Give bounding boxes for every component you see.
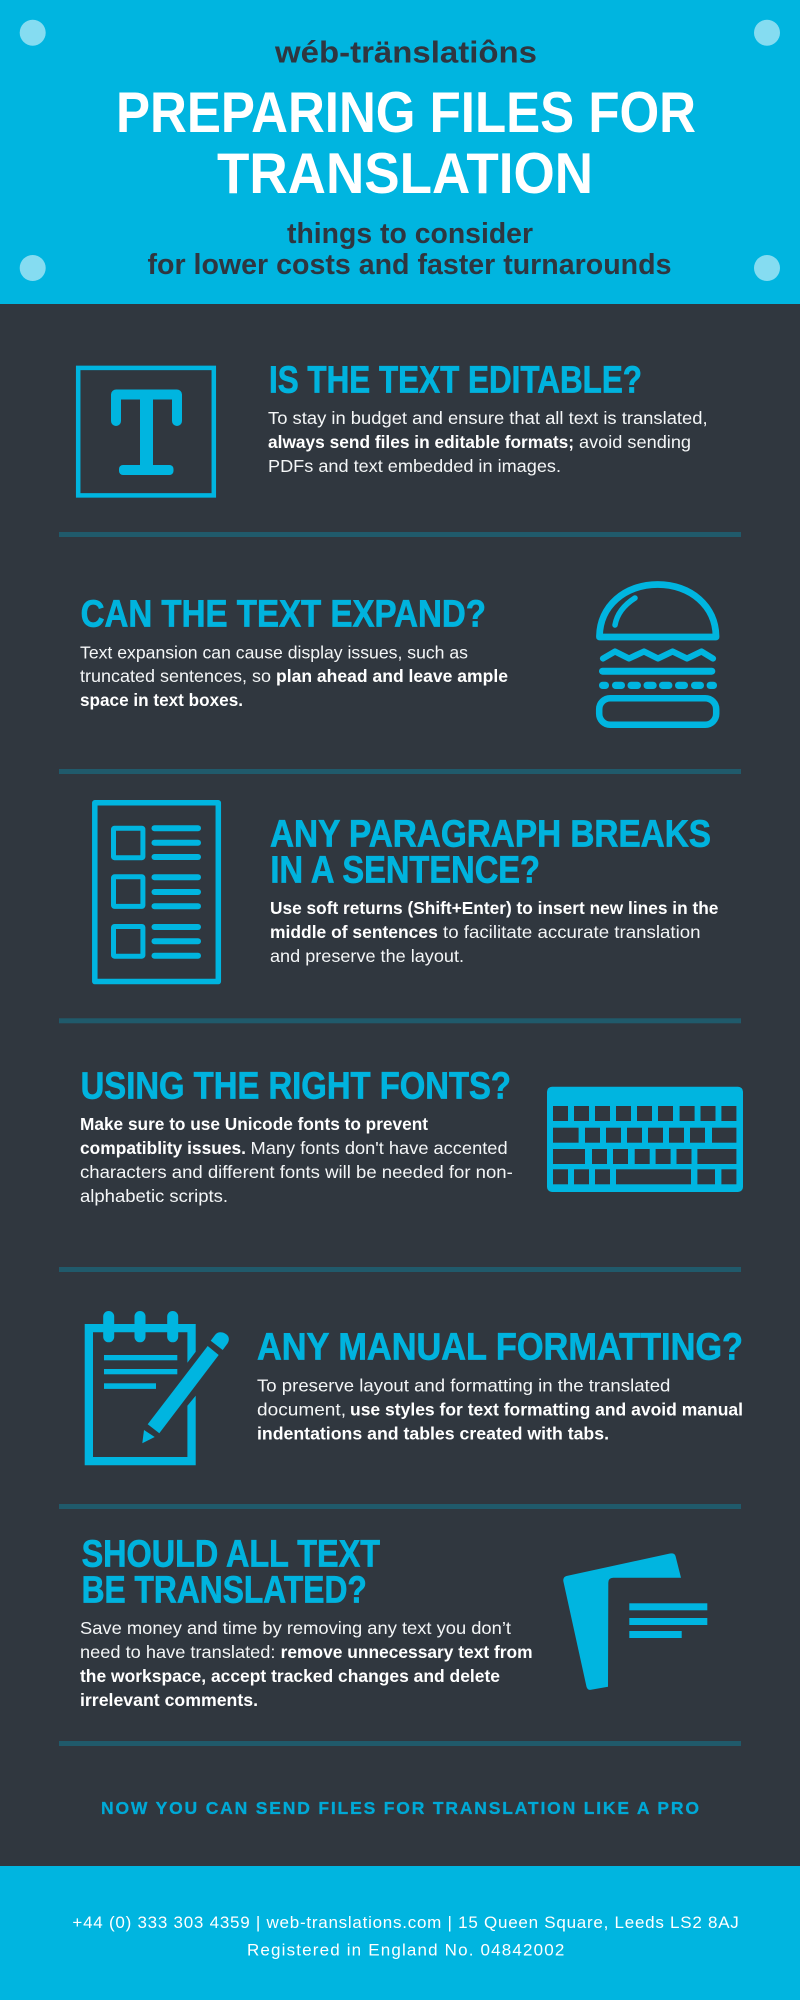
body text: characters and different fonts will be needed for non- bbox=[80, 1162, 513, 1182]
body text: To stay in budget and ensure that all text is translated, bbox=[268, 408, 708, 428]
body text bbox=[80, 1114, 513, 1206]
panel: should all text be translated bbox=[80, 1534, 707, 1710]
body text: Text expansion can cause display issues, such as bbox=[80, 642, 468, 662]
heading: BE TRANSLATED? bbox=[82, 1569, 367, 1611]
heading bbox=[270, 814, 711, 892]
icon: corner dots bbox=[20, 20, 780, 281]
contact line: +44 (0) 333 303 4359 | web-translations.com | 15 Queen Square, Leeds LS2 8AJ bbox=[72, 1913, 739, 1932]
icon: notepad and pencil bbox=[85, 1311, 229, 1465]
body text: Many fonts don't have accented bbox=[250, 1138, 508, 1158]
subtitle: things to consider bbox=[287, 218, 533, 250]
body text: document, bbox=[257, 1399, 346, 1419]
body text: PDFs and text embedded in images. bbox=[268, 456, 561, 476]
body text: plan ahead and leave ample bbox=[276, 666, 508, 686]
title: PREPARING FILES FOR bbox=[116, 81, 696, 145]
body text: always send files in editable formats; bbox=[268, 432, 574, 452]
icon: letter T in square bbox=[78, 368, 214, 495]
subtitle bbox=[148, 218, 672, 281]
icon: document with checklist bbox=[95, 803, 218, 982]
heading: IS THE TEXT EDITABLE? bbox=[269, 360, 642, 402]
body text: to facilitate accurate translation bbox=[443, 922, 700, 942]
body text bbox=[268, 408, 708, 476]
panel: is the text editable bbox=[78, 360, 708, 495]
heading: SHOULD ALL TEXT bbox=[82, 1534, 380, 1576]
panel: header banner bbox=[0, 0, 800, 304]
body text: Make sure to use Unicode fonts to prevent bbox=[80, 1114, 428, 1134]
icon: keyboard bbox=[547, 1087, 743, 1192]
registration line: Registered in England No. 04842002 bbox=[247, 1940, 564, 1959]
body text: truncated sentences, so bbox=[80, 666, 271, 686]
heading: USING THE RIGHT FONTS? bbox=[81, 1065, 511, 1107]
body text: need to have translated: bbox=[80, 1642, 276, 1662]
body text: space in text boxes. bbox=[80, 690, 243, 710]
panel: right fonts bbox=[80, 1065, 743, 1206]
body text: avoid sending bbox=[579, 432, 691, 452]
heading: ANY MANUAL FORMATTING? bbox=[257, 1326, 743, 1368]
icon: burger bbox=[599, 584, 717, 725]
body text: remove unnecessary text from bbox=[281, 1642, 533, 1662]
panel: manual formatting bbox=[85, 1311, 743, 1465]
body text: indentations and tables created with tabs. bbox=[257, 1423, 609, 1443]
body text: use styles for text formatting and avoid manual bbox=[350, 1399, 743, 1419]
body text: irrelevant comments. bbox=[80, 1690, 258, 1710]
body text bbox=[257, 1375, 743, 1443]
body text: compatiblity issues. bbox=[80, 1138, 246, 1158]
body text bbox=[80, 642, 508, 710]
body text: and preserve the layout. bbox=[270, 946, 464, 966]
panel: can the text expand bbox=[80, 584, 717, 725]
body text: Use soft returns (Shift+Enter) to insert new lines in the bbox=[270, 898, 719, 918]
heading: ANY PARAGRAPH BREAKS bbox=[270, 814, 711, 856]
icon: cropped document bbox=[563, 1553, 707, 1690]
title bbox=[116, 81, 696, 206]
brand name: wéb-tränslatiôns bbox=[274, 35, 537, 70]
body text: Save money and time by removing any text you don’t bbox=[80, 1618, 511, 1638]
body text: the workspace, accept tracked changes and delete bbox=[80, 1666, 500, 1686]
body text bbox=[270, 898, 719, 966]
panel: footer bbox=[0, 1866, 800, 2000]
heading: CAN THE TEXT EXPAND? bbox=[81, 594, 486, 636]
subtitle: for lower costs and faster turnarounds bbox=[148, 249, 672, 281]
title: TRANSLATION bbox=[217, 142, 593, 206]
heading bbox=[82, 1534, 380, 1611]
body text bbox=[80, 1618, 533, 1710]
panel: paragraph breaks bbox=[95, 803, 719, 982]
callout: NOW YOU CAN SEND FILES FOR TRANSLATION LIKE A PRO bbox=[101, 1798, 699, 1818]
body text: To preserve layout and formatting in the translated bbox=[257, 1375, 670, 1395]
heading: IN A SENTENCE? bbox=[270, 850, 540, 892]
body text: middle of sentences bbox=[270, 922, 438, 942]
body text: alphabetic scripts. bbox=[80, 1186, 228, 1206]
